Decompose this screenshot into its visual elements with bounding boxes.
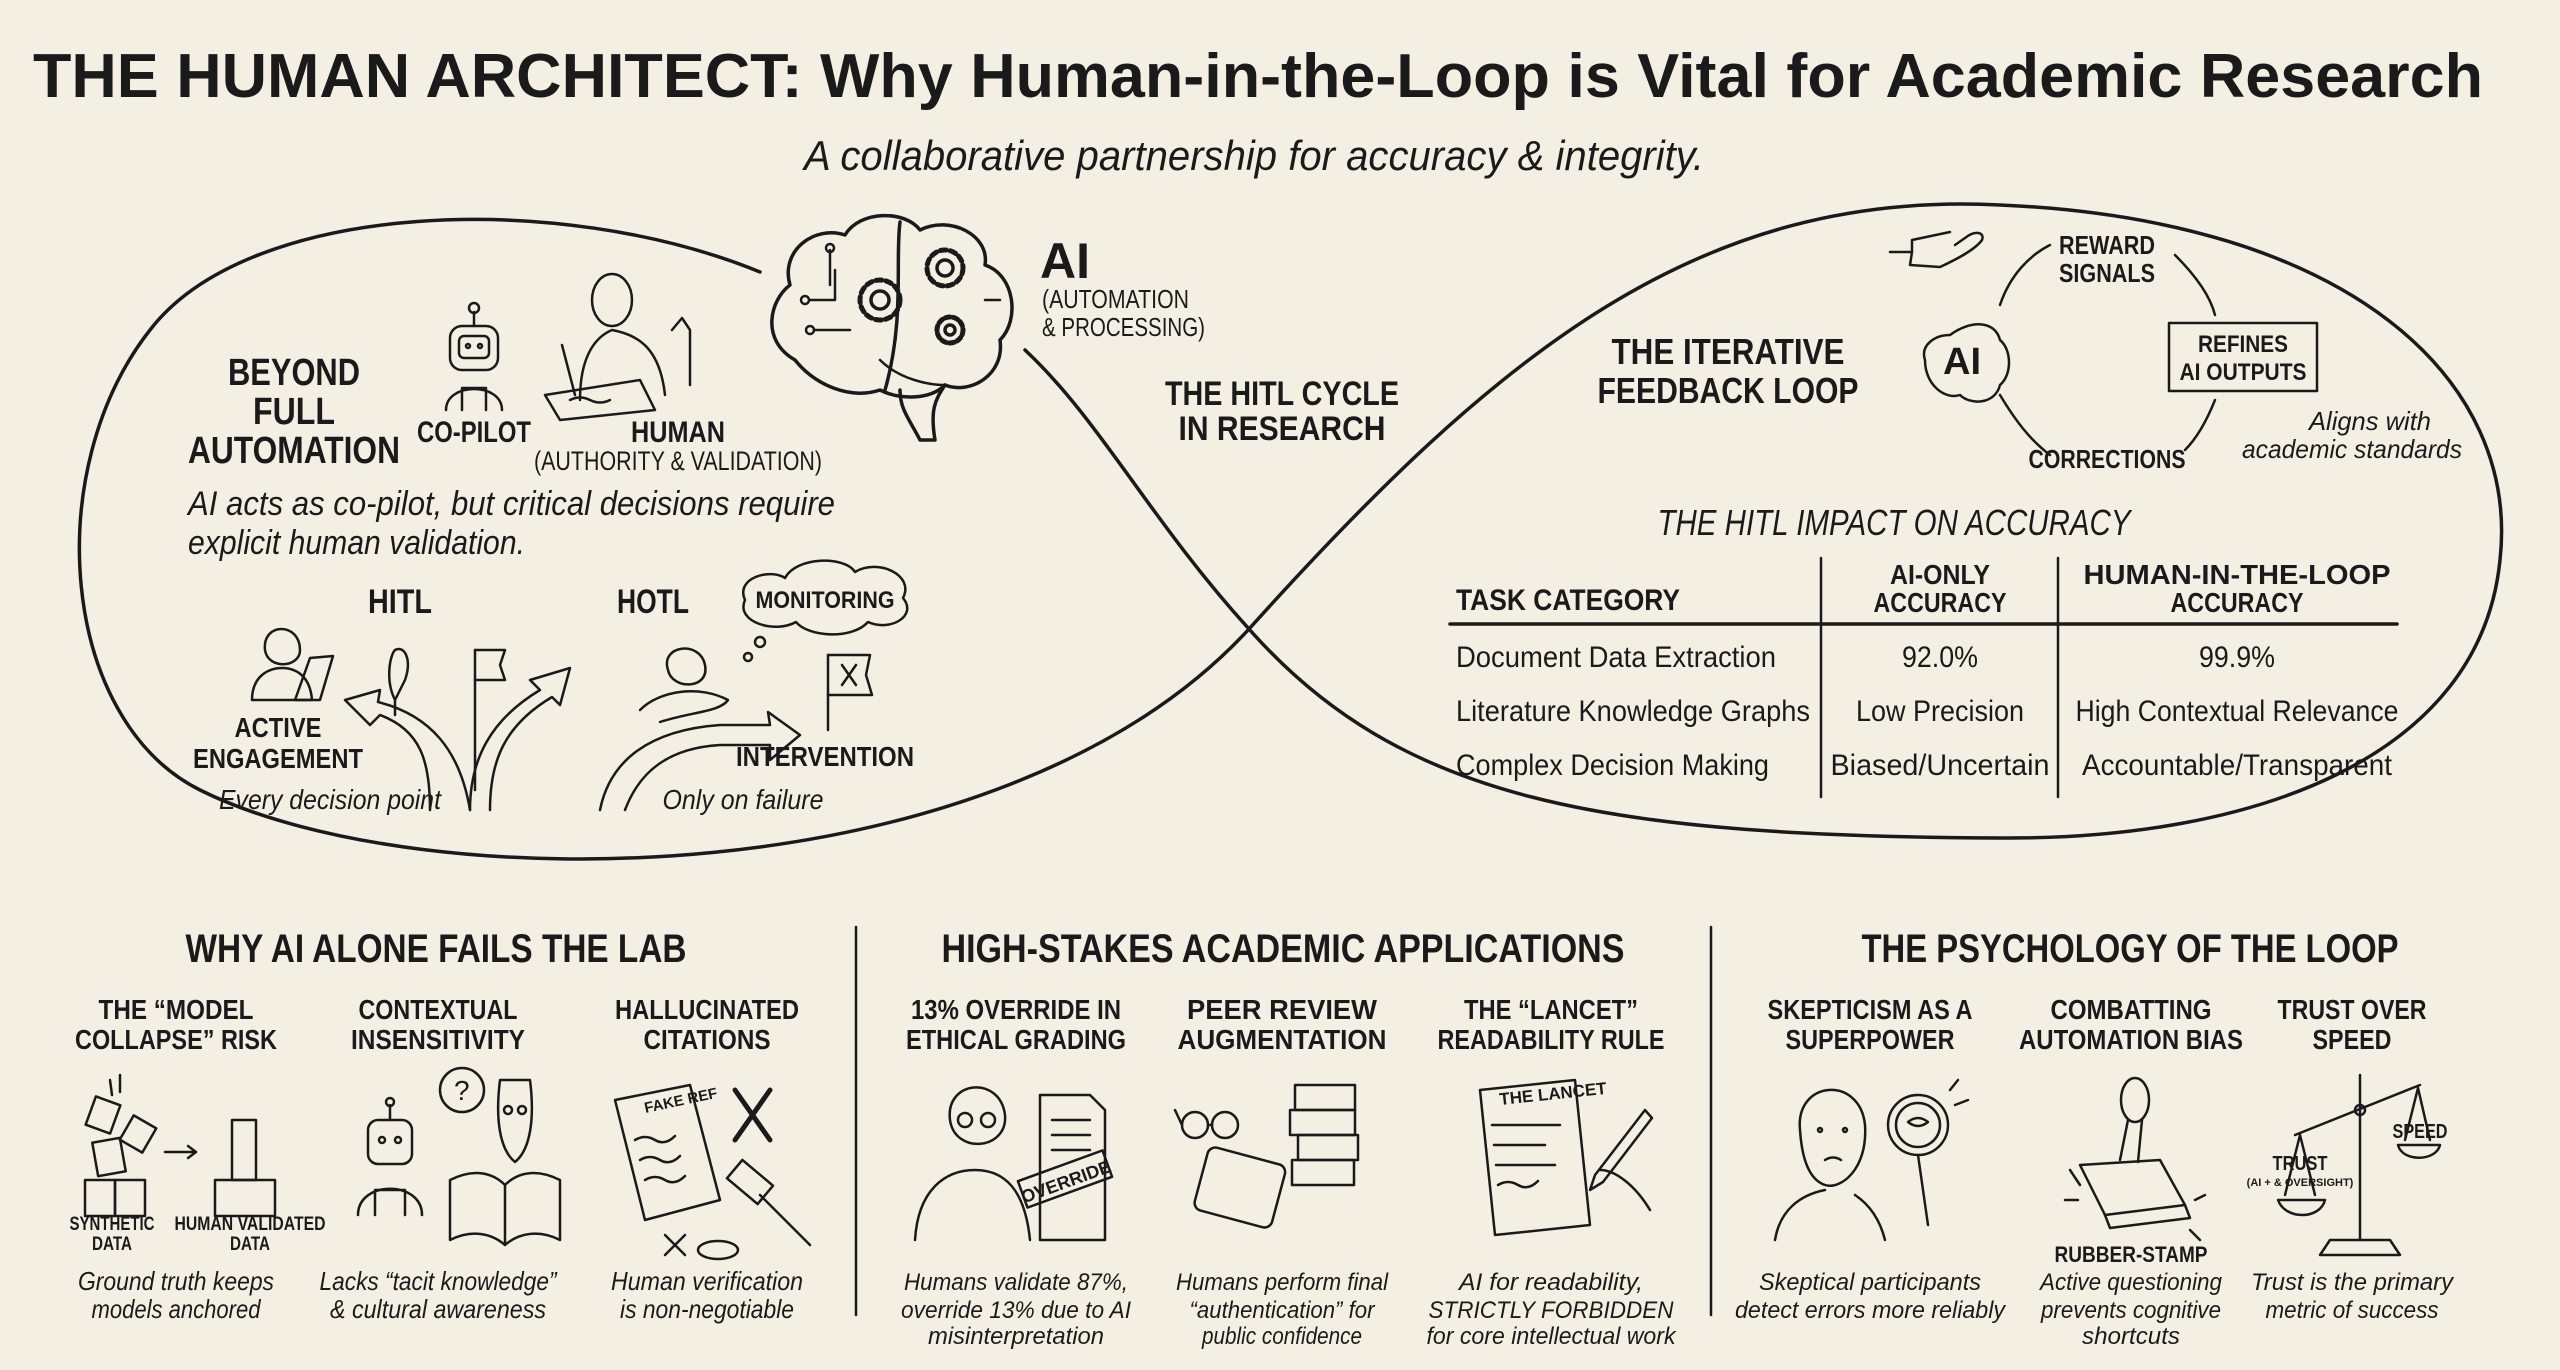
label: AI automation: & PROCESSING) (1042, 312, 1205, 342)
column: ethical grading: 13% OVERRIDE IN (911, 994, 1121, 1025)
labels: co-pilot / human (417, 416, 822, 476)
column: hallucinated citations (611, 994, 810, 1324)
infinity loop (79, 204, 2502, 859)
table: accuracy comparison: Document Data Extraction (1456, 641, 1776, 674)
column: model collapse: COLLAPSE” RISK (75, 1024, 277, 1055)
label: intervention (662, 741, 914, 815)
icon: monitoring cloud: MONITORING (756, 587, 894, 614)
heading: beyond full automation: BEYOND (228, 352, 360, 394)
icon: feedback cycle: AI (1943, 341, 1981, 383)
icon: hand (1890, 232, 1983, 267)
table: accuracy comparison: High Contextual Relevance (2076, 695, 2398, 728)
heading: HITL / HOTL: HITL (368, 583, 432, 621)
table: accuracy comparison: Low Precision (1856, 695, 2024, 728)
column: contextual insensitivity: Lacks “tacit knowledge” (320, 1266, 558, 1296)
column: trust over speed: Trust is the primary (2251, 1269, 2455, 1296)
column: hallucinated citations: FAKE REF (643, 1085, 719, 1117)
column: lancet readability rule: STRICTLY FORBIDDEN (1428, 1297, 1674, 1324)
table: accuracy comparison: Accountable/Transparent (2082, 749, 2393, 782)
column: trust over speed (2247, 994, 2455, 1324)
column: skepticism: SKEPTICISM AS A (1768, 994, 1972, 1025)
icon: robot co-pilot (446, 303, 502, 410)
column: automation bias: shortcuts (2082, 1323, 2180, 1350)
label: AI automation: AI (1040, 233, 1090, 289)
column: model collapse: DATA (92, 1234, 132, 1255)
column: contextual insensitivity: CONTEXTUAL (358, 994, 518, 1025)
heading: HITL / HOTL (368, 583, 689, 621)
labels: co-pilot / human: CO-PILOT (417, 416, 531, 449)
labels: co-pilot / human: HUMAN (631, 416, 725, 449)
table: accuracy comparison: Literature Knowledge Graphs (1456, 695, 1810, 728)
icon: human (545, 274, 690, 420)
column: lancet readability rule: AI for readability, (1457, 1269, 1643, 1296)
table: accuracy comparison: TASK CATEGORY (1456, 584, 1680, 617)
column: model collapse: THE “MODEL (98, 994, 254, 1025)
table: accuracy comparison: 92.0% (1902, 641, 1978, 674)
column: hallucinated citations: Human verification (611, 1266, 803, 1296)
column: automation bias: Active questioning (2038, 1269, 2223, 1296)
column: model collapse: Ground truth keeps (78, 1266, 274, 1296)
heading: beyond full automation (188, 352, 400, 472)
column: peer review augmentation: “authentication” for (1190, 1297, 1375, 1324)
column: skepticism: detect errors more reliably (1735, 1297, 2007, 1324)
label: active engagement (193, 712, 442, 815)
title: THE HUMAN ARCHITECT: Why Human-in-the-Loop is Vital for Academic Research (33, 42, 2483, 111)
panel: psychology of the loop (1735, 927, 2455, 1350)
heading: beyond full automation: FULL (253, 391, 335, 433)
column: model collapse: models anchored (92, 1294, 262, 1324)
column: automation bias: RUBBER-STAMP (2054, 1242, 2208, 1267)
heading: beyond full automation: AUTOMATION (188, 430, 400, 472)
heading: iterative feedback loop: THE ITERATIVE (1612, 331, 1844, 372)
label: AI automation: (AUTOMATION (1042, 284, 1189, 314)
text: co-pilot note (186, 485, 835, 562)
icon: AI brain (772, 216, 1012, 440)
label: active engagement: ACTIVE (234, 712, 322, 743)
column: lancet readability rule: THE LANCET (1498, 1079, 1608, 1109)
column: skepticism: SUPERPOWER (1786, 1024, 1954, 1055)
column: peer review augmentation (1175, 994, 1389, 1350)
column: peer review augmentation: PEER REVIEW (1187, 994, 1378, 1025)
labels: co-pilot / human: (AUTHORITY & VALIDATION) (534, 446, 822, 476)
panel: psychology of the loop: THE PSYCHOLOGY OF THE LOOP (1862, 927, 2398, 971)
icon: feedback cycle: SIGNALS (2059, 258, 2155, 288)
column: lancet readability rule: for core intellectual work (1426, 1323, 1677, 1350)
column: skepticism: Skeptical participants (1759, 1269, 1981, 1296)
panel: why AI alone fails the lab (70, 927, 810, 1324)
heading: iterative feedback loop: FEEDBACK LOOP (1598, 370, 1858, 411)
column: trust over speed: TRUST OVER (2278, 994, 2426, 1025)
column: trust over speed: (AI + & OVERSIGHT) (2247, 1177, 2354, 1189)
column: hallucinated citations: CITATIONS (644, 1024, 770, 1055)
table: accuracy comparison: ACCURACY (1874, 587, 2007, 618)
column: ethical grading: OVERRIDE (1018, 1156, 1114, 1207)
table: accuracy comparison: ACCURACY (2170, 587, 2304, 618)
panel: why AI alone fails the lab: WHY AI ALONE FAILS THE LAB (186, 927, 686, 971)
column: trust over speed: TRUST (2272, 1153, 2328, 1175)
label: intervention: INTERVENTION (736, 741, 914, 772)
column: lancet readability rule (1426, 994, 1677, 1350)
column: contextual insensitivity (320, 994, 560, 1324)
label: active engagement: ENGAGEMENT (193, 743, 363, 774)
icon: feedback cycle: REWARD (2059, 230, 2155, 260)
label: intervention: Only on failure (662, 784, 824, 815)
column: model collapse: SYNTHETIC (70, 1214, 155, 1235)
column: contextual insensitivity: INSENSITIVITY (351, 1024, 525, 1055)
box: refines AI outputs: REFINES (2198, 331, 2288, 358)
column: ethical grading: ETHICAL GRADING (906, 1024, 1126, 1055)
heading: HITL cycle: THE HITL CYCLE (1165, 375, 1399, 413)
heading: HITL cycle: IN RESEARCH (1178, 410, 1386, 448)
note: aligns with academic standards: academic standards (2242, 434, 2462, 464)
table: accuracy comparison: AI-ONLY (1890, 559, 1990, 590)
table: accuracy comparison: Biased/Uncertain (1830, 749, 2050, 782)
column: trust over speed: SPEED (2392, 1121, 2448, 1143)
column: trust over speed: SPEED (2312, 1024, 2392, 1055)
column: ethical grading: Humans validate 87%, (904, 1269, 1128, 1296)
icon: woman at laptop (252, 629, 333, 700)
heading: HITL cycle (1165, 375, 1399, 448)
column: hallucinated citations: is non-negotiable (620, 1294, 794, 1324)
column: lancet readability rule: THE “LANCET” (1464, 994, 1638, 1025)
heading: HITL / HOTL: HOTL (617, 583, 689, 621)
label: active engagement: Every decision point (219, 784, 442, 815)
note: aligns with academic standards (2242, 406, 2462, 464)
table: accuracy comparison: Complex Decision Making (1456, 749, 1769, 782)
table: accuracy comparison: HUMAN-IN-THE-LOOP (2084, 559, 2390, 590)
icon: monitoring cloud (743, 561, 907, 661)
label: AI automation (1040, 233, 1205, 342)
text: co-pilot note: explicit human validation. (188, 524, 525, 562)
panel: high-stakes academic applications (901, 927, 1677, 1350)
text: co-pilot note: AI acts as co-pilot, but critical decisions require (186, 485, 835, 523)
icon: sleeping human and intervention flag (600, 649, 872, 810)
column: model collapse: HUMAN VALIDATED (174, 1214, 326, 1235)
column: peer review augmentation: Humans perform final (1176, 1269, 1389, 1296)
column: trust over speed: metric of success (2266, 1297, 2438, 1324)
note: aligns with academic standards: Aligns with (2307, 406, 2431, 436)
column: ethical grading: override 13% due to AI (901, 1297, 1131, 1324)
panel: high-stakes academic applications: HIGH-STAKES ACADEMIC APPLICATIONS (942, 927, 1624, 971)
heading: iterative feedback loop (1598, 331, 1858, 411)
column: ethical grading (901, 994, 1131, 1350)
column: automation bias (2019, 994, 2243, 1350)
column: model collapse: DATA (230, 1234, 270, 1255)
column: model collapse (70, 994, 326, 1324)
icon: forked arrows (345, 649, 570, 810)
column: contextual insensitivity: ? (454, 1075, 470, 1106)
subtitle: A collaborative partnership for accuracy & integrity. (801, 132, 1704, 179)
column: ethical grading: misinterpretation (928, 1323, 1104, 1350)
heading: accuracy table: THE HITL IMPACT ON ACCURACY (1658, 502, 2133, 543)
icon: feedback cycle (1924, 230, 2215, 474)
column: lancet readability rule: READABILITY RULE (1438, 1024, 1664, 1055)
column: hallucinated citations: HALLUCINATED (615, 994, 799, 1025)
column: automation bias: prevents cognitive (2040, 1297, 2221, 1324)
table: accuracy comparison (1450, 558, 2398, 797)
column: skepticism (1735, 994, 2007, 1324)
column: contextual insensitivity: & cultural awareness (330, 1294, 546, 1324)
icon: feedback cycle: CORRECTIONS (2028, 444, 2186, 474)
column: peer review augmentation: public confidence (1201, 1323, 1362, 1350)
column: automation bias: AUTOMATION BIAS (2019, 1024, 2243, 1055)
box: refines AI outputs (2169, 323, 2317, 391)
box: refines AI outputs: AI OUTPUTS (2180, 359, 2306, 386)
table: accuracy comparison: 99.9% (2199, 641, 2275, 674)
column: automation bias: COMBATTING (2050, 994, 2212, 1025)
column: peer review augmentation: AUGMENTATION (1178, 1024, 1386, 1055)
